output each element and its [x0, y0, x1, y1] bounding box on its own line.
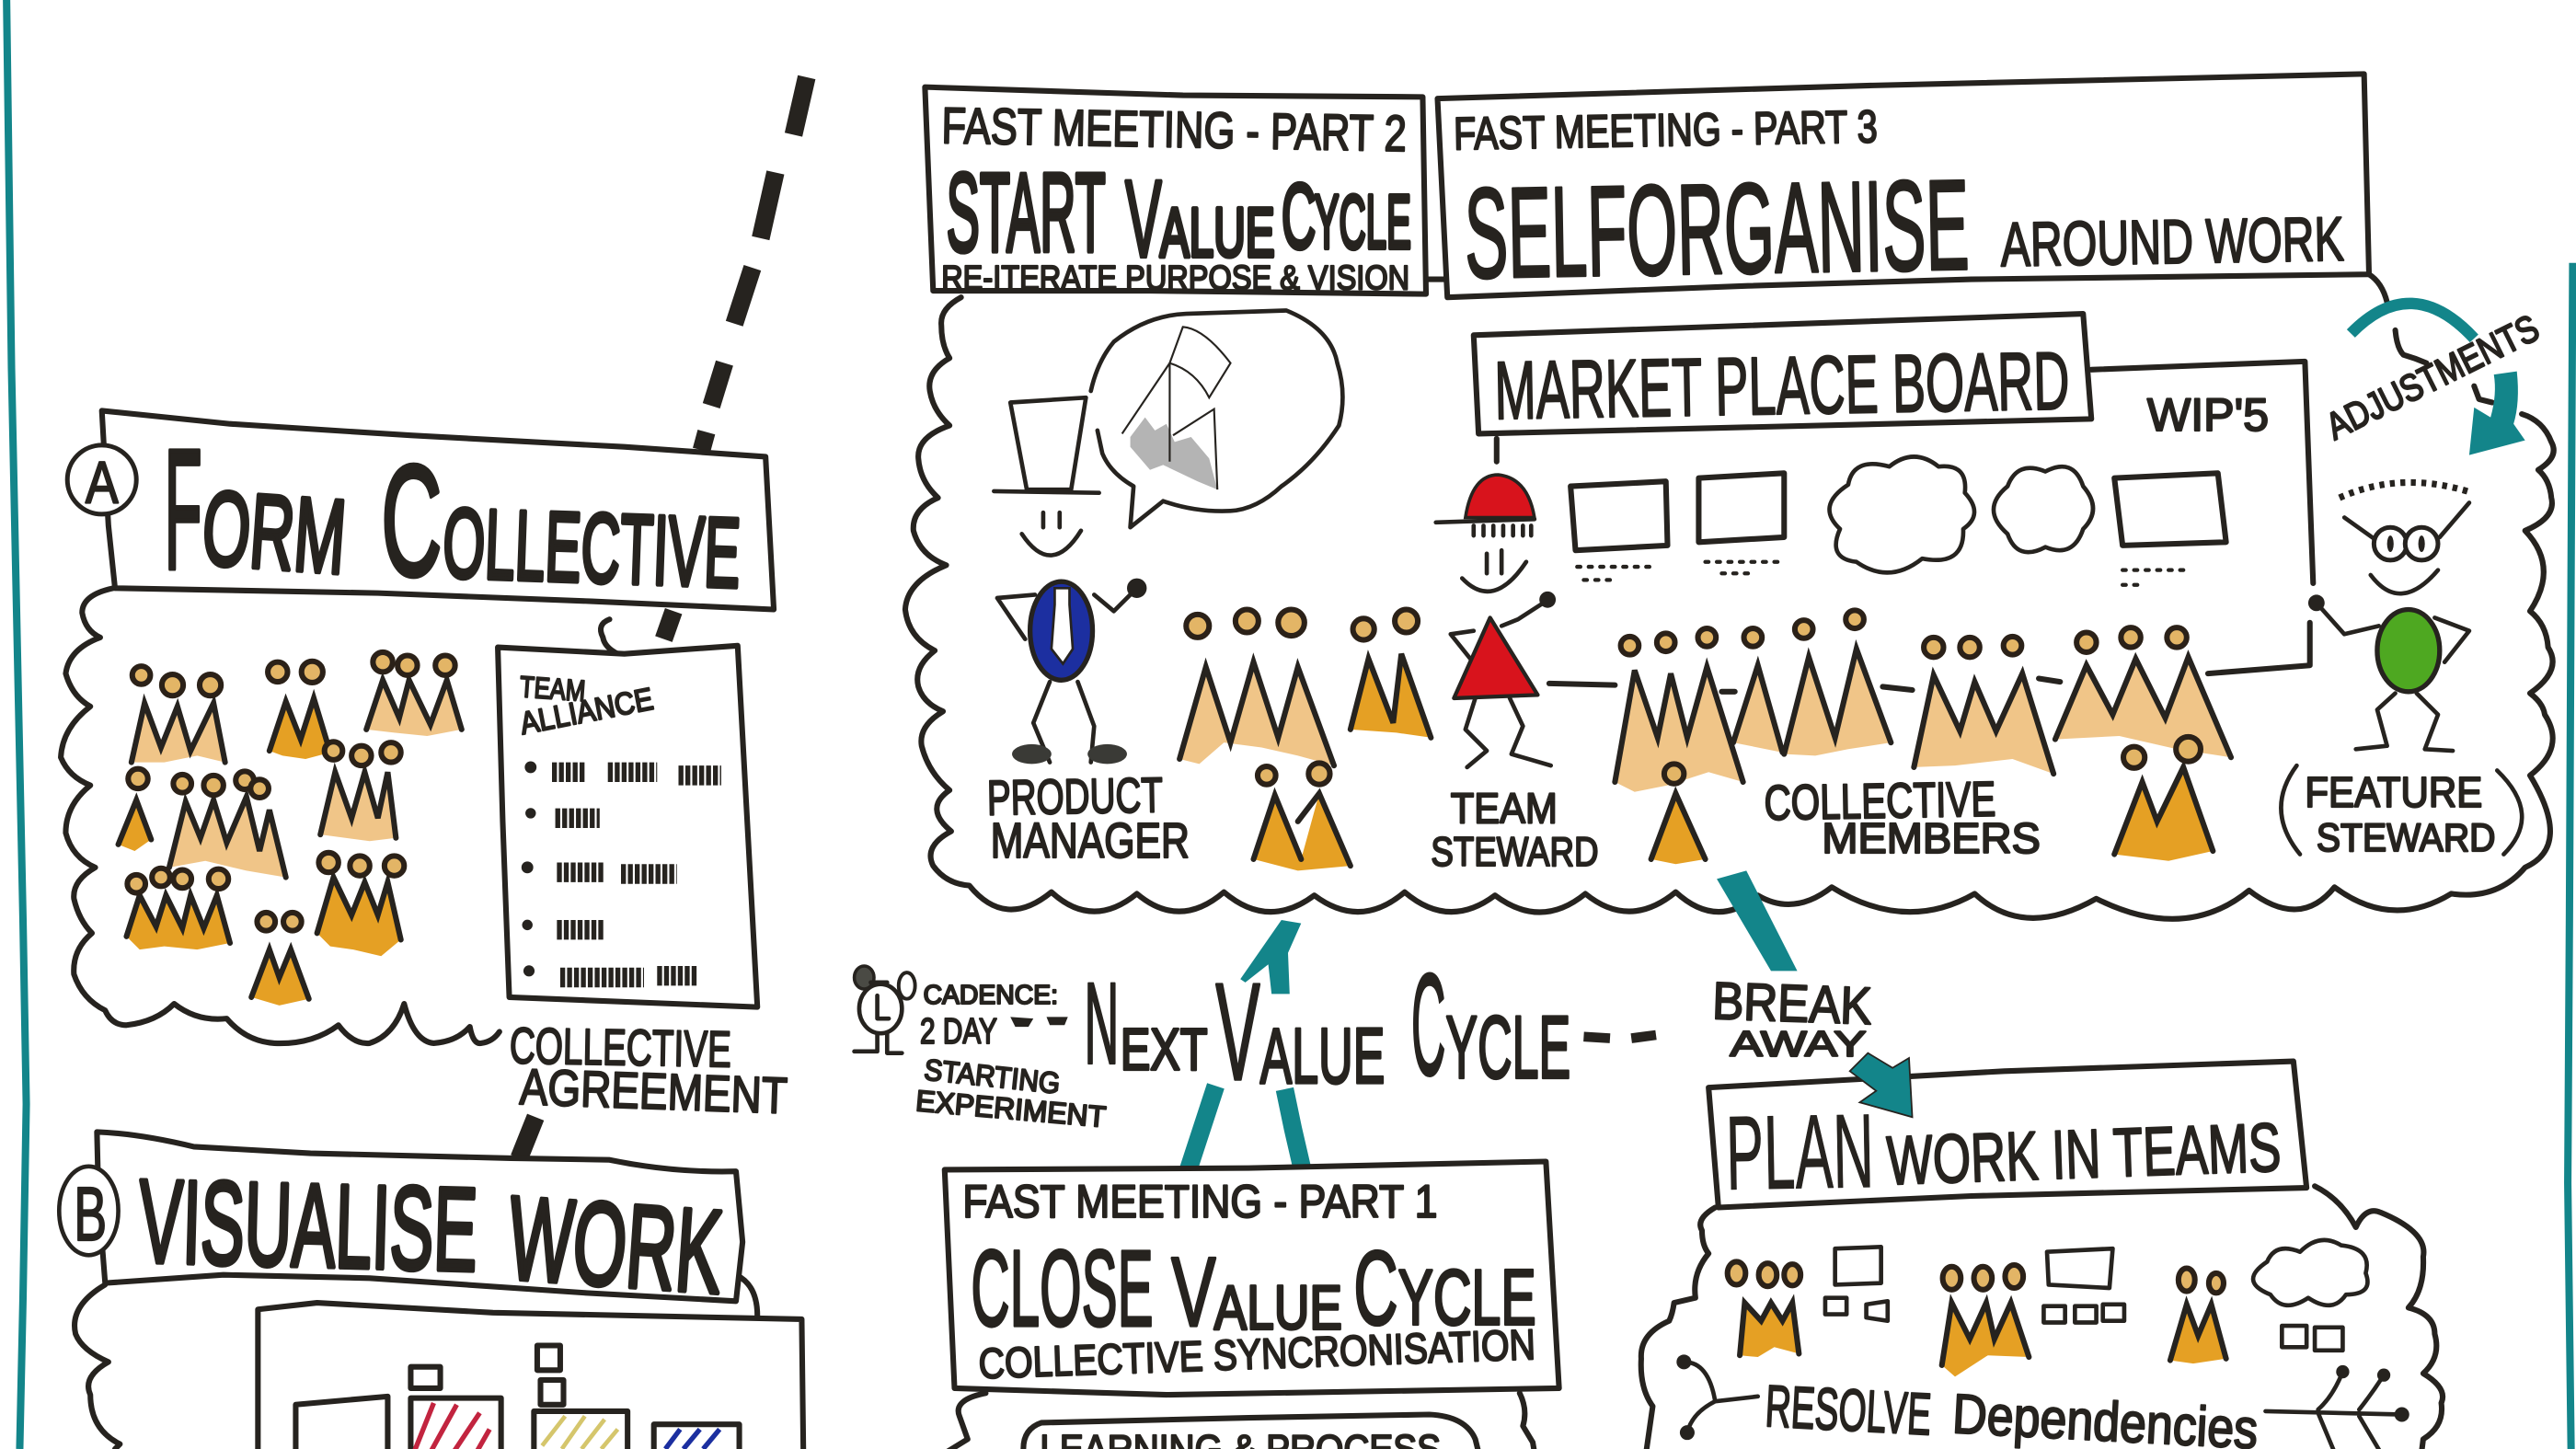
- work board B: [258, 1303, 803, 1449]
- heading box: fast meeting part 2: YCLE: [1315, 181, 1411, 265]
- label: team steward: [1431, 785, 1599, 875]
- heading box: fast meeting part 2: C: [1282, 166, 1316, 269]
- cadence note: CADENCE:: [924, 981, 1058, 1010]
- panel: close value cycle: C: [1353, 1230, 1398, 1347]
- heading box: fast meeting part 3: [1437, 74, 2369, 305]
- label: product manager: [986, 768, 1190, 868]
- resolve dependencies: [1676, 1354, 2409, 1449]
- panel: plan work in teams: [1641, 1053, 2443, 1449]
- right teal border: [2568, 263, 2572, 1449]
- dashes after next value cycle: [1583, 1035, 1656, 1039]
- panel: close value cycle: V: [1171, 1236, 1215, 1347]
- panel: close value cycle: FAST MEETING - PART 1: [962, 1176, 1437, 1227]
- team alliance sheet: [498, 619, 757, 1007]
- heading: next value cycle: EXT: [1121, 1017, 1207, 1083]
- label: collective members: [1764, 773, 2041, 862]
- label: collective agreement: COLLECTIVE: [509, 1017, 731, 1078]
- teal arrow head: [1850, 1053, 1913, 1117]
- panel: close value cycle: CLOSE: [971, 1227, 1154, 1349]
- collective members: [1549, 610, 2231, 864]
- cadence note: EXPERIMENT: [914, 1084, 1108, 1133]
- badge B: B: [74, 1173, 107, 1257]
- heading box: fast meeting part 3: FAST MEETING - PART 3: [1454, 100, 1878, 159]
- cadence note: 2 DAY: [920, 1011, 997, 1052]
- heading box: fast meeting part 2: V: [1125, 158, 1162, 280]
- panel: close value cycle: YCLE: [1398, 1253, 1536, 1341]
- label: team steward: TEAM: [1451, 785, 1558, 833]
- people groups A: [119, 652, 462, 1006]
- dashed timeline connector: [519, 77, 807, 1158]
- heading box: fast meeting part 2: FAST MEETING - PART 2: [941, 97, 1407, 162]
- break away arrow: BREAK: [1711, 972, 1873, 1036]
- team alliance sheet: ALLIANCE: [517, 682, 656, 742]
- heading box: fast meeting part 3: AROUND WORK: [2000, 205, 2344, 280]
- heading box: fast meeting part 2: [925, 87, 1447, 296]
- label: feature steward: STEWARD: [2317, 816, 2495, 860]
- break away arrow: [1711, 870, 1873, 1064]
- heading: form collective: F: [165, 415, 202, 605]
- plan heading box: [1708, 1062, 2306, 1207]
- panel: close value cycle: COLLECTIVE SYNCRONISATION: [978, 1320, 1536, 1387]
- heading: next value cycle: V: [1215, 954, 1260, 1109]
- people near product manager: [1179, 609, 1431, 870]
- panel: B visualise work: [59, 1132, 803, 1449]
- badge A: [67, 445, 136, 515]
- teal connectors from close value cycle: [1188, 1086, 1303, 1171]
- label: collective members: COLLECTIVE: [1764, 773, 1996, 831]
- panel: close value cycle: ALUE: [1214, 1274, 1342, 1343]
- marketplace board: [1474, 314, 2313, 673]
- teams and work items: [1728, 1240, 2367, 1376]
- label: team steward: STEWARD: [1431, 830, 1598, 875]
- left teal border: [6, 0, 27, 1449]
- heading: next value cycle: [1085, 945, 1570, 1109]
- label: product manager: PRODUCT: [986, 768, 1163, 826]
- cadence note: [855, 966, 1108, 1133]
- board title: MARKET PLACE BOARD: [1494, 334, 2070, 436]
- board title: [1474, 314, 2091, 436]
- label: collective members: MEMBERS: [1822, 814, 2041, 862]
- heading: next value cycle: N: [1085, 960, 1119, 1087]
- badge B: [59, 1167, 119, 1257]
- panel: plan work in teams: PLAN: [1725, 1093, 1875, 1213]
- heading: next value cycle: ALUE: [1260, 1012, 1385, 1100]
- heading: form collective: C: [381, 433, 442, 609]
- heading box A: [102, 410, 774, 609]
- wip limit: WIP'5: [2147, 389, 2269, 441]
- badge A: A: [86, 449, 119, 515]
- heading box B: [97, 1132, 742, 1301]
- heading box: fast meeting part 3: SELFORGANISE: [1464, 153, 1971, 305]
- main cloud outline: [905, 297, 2554, 919]
- cloud outline A: [61, 588, 500, 1043]
- heading box: fast meeting part 2: RE-ITERATE PURPOSE & VISION: [941, 258, 1409, 296]
- plan cloud outline: [1641, 1186, 2443, 1449]
- panel: plan work in teams: WORK IN TEAMS: [1885, 1109, 2283, 1199]
- character: team steward: [1436, 475, 1556, 767]
- panel: close value cycle: [945, 1161, 1559, 1449]
- cadence note: STARTING: [923, 1052, 1062, 1100]
- heading: next value cycle: C: [1411, 945, 1445, 1106]
- team alliance sheet: TEAM: [519, 670, 587, 707]
- heading: next value cycle: YCLE: [1445, 998, 1570, 1097]
- heading: form collective: ORM: [199, 470, 350, 596]
- break away arrow: AWAY: [1730, 1024, 1867, 1064]
- board cards and ideas: [1570, 456, 2226, 585]
- panel: A form collective: [61, 410, 788, 1124]
- cloud outline B: [75, 1275, 757, 1449]
- heading: form collective: OLLECTIVE: [442, 488, 742, 608]
- panel: self organise cloud: [905, 274, 2554, 919]
- teal arrow into start value cycle: [1240, 920, 1301, 994]
- heading: form collective: [165, 415, 742, 609]
- label: product manager: MANAGER: [991, 814, 1190, 868]
- character: feature steward: [2308, 482, 2473, 751]
- label: feature steward: [2281, 765, 2522, 860]
- heading: visualise work: VISUALISE: [137, 1156, 479, 1296]
- label: feature steward: FEATURE: [2305, 768, 2482, 816]
- heading: visualise work: WORK: [504, 1173, 727, 1318]
- speech bubble with mountain and flag: [1091, 311, 1342, 527]
- character: product manager: [994, 397, 1146, 764]
- label: collective agreement: AGREEMENT: [519, 1058, 788, 1124]
- label: collective agreement: [509, 1017, 788, 1124]
- heading box: fast meeting part 2: START: [947, 150, 1106, 275]
- heading box: fast meeting part 2: ALUE: [1160, 194, 1275, 271]
